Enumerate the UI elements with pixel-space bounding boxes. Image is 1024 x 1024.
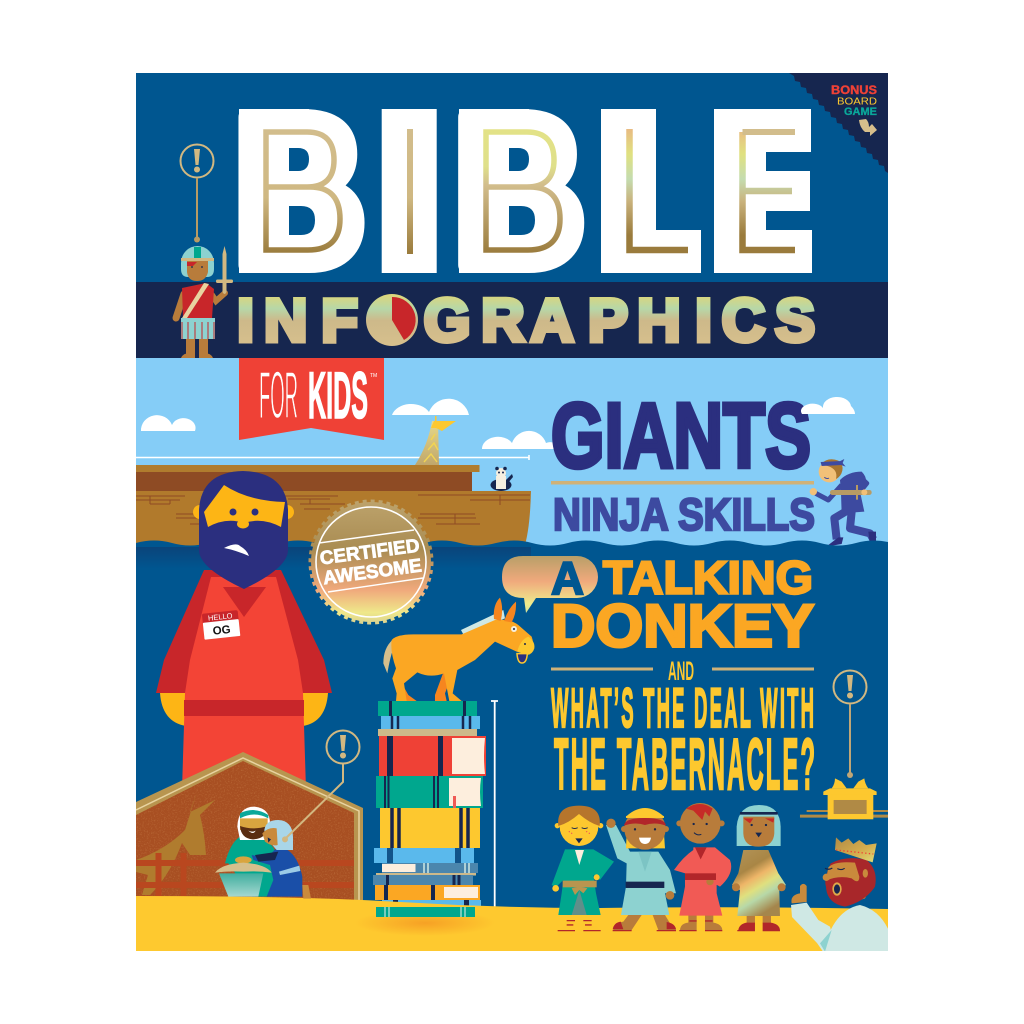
panda	[490, 467, 513, 491]
letter B	[458, 109, 584, 273]
letter E	[714, 109, 812, 273]
donkey snout	[517, 637, 534, 655]
steel book	[373, 875, 473, 885]
donkey ears	[494, 598, 516, 622]
Og robe	[182, 577, 306, 790]
callout: alert pin	[180, 144, 214, 242]
bottom book	[376, 907, 475, 917]
Og face	[204, 485, 285, 527]
banner text: TM	[370, 373, 377, 379]
donkey tail	[383, 640, 392, 673]
yellow book	[380, 808, 480, 848]
ninja	[810, 459, 876, 546]
Og nose	[237, 520, 249, 528]
king crown	[835, 837, 877, 862]
height measure line	[491, 701, 498, 917]
steel book with pages	[382, 863, 478, 873]
donkey body and head	[391, 620, 533, 701]
blue book	[374, 848, 474, 863]
king beard and hair	[825, 858, 876, 907]
Mary head	[262, 820, 293, 850]
donkey mane	[461, 610, 505, 634]
king neck	[855, 885, 872, 902]
silhouette: donkey	[136, 792, 215, 895]
donkey mouth	[517, 654, 527, 663]
teal book	[378, 701, 477, 716]
WHAT'S THE DEAL WITH: WHAT’S THE DEAL WITH	[551, 676, 814, 739]
Og mouth	[224, 544, 249, 556]
bonus text: BOARD	[837, 96, 877, 108]
letter L	[601, 109, 701, 273]
BIBLE title	[238, 109, 812, 273]
baby	[235, 856, 252, 864]
navy title band	[136, 282, 888, 358]
king eyes	[825, 868, 845, 870]
top blue background	[136, 73, 888, 283]
king robe	[823, 905, 889, 952]
kid 1	[552, 806, 614, 931]
callout: tabernacle alert pin	[834, 670, 866, 778]
bonus text	[832, 85, 877, 116]
letter B: B	[453, 72, 586, 311]
Og ears	[193, 505, 207, 519]
donkey eye	[511, 626, 517, 632]
banner text: FOR	[259, 358, 298, 433]
GIANTS: GIANTS	[551, 385, 811, 487]
divider rules	[551, 668, 814, 670]
letter B: B	[233, 72, 366, 311]
pie chart letter O	[366, 294, 418, 346]
bonus corner	[789, 73, 888, 173]
water with wave top	[136, 540, 892, 951]
ninja arms	[816, 474, 867, 500]
ark cabin	[136, 472, 472, 492]
letter E: E	[709, 70, 813, 311]
seal text: AWESOME	[322, 556, 423, 589]
kid 3	[674, 803, 731, 931]
Mary robe	[252, 849, 302, 897]
manger	[215, 863, 272, 897]
blue book	[381, 716, 480, 729]
Og the giant	[156, 471, 332, 790]
ninja body	[840, 472, 866, 513]
THE TABERNACLE?: THE TABERNACLE?	[554, 725, 815, 805]
letter L: L	[595, 72, 699, 312]
Joseph robe	[225, 837, 278, 897]
tan book	[378, 729, 477, 736]
Joseph and Mary with manger	[215, 807, 311, 899]
ark of the covenant	[800, 778, 889, 819]
Og hands	[160, 693, 328, 726]
ninja sword	[830, 485, 872, 500]
headline text	[551, 385, 855, 805]
speech bubble with A: A	[551, 552, 584, 604]
DONKEY: DONKEY	[551, 592, 814, 660]
text: KIDS	[308, 358, 368, 432]
certified awesome seal	[311, 502, 431, 622]
donkey	[383, 598, 534, 701]
blue book	[382, 900, 481, 907]
TALKING: TALKING	[603, 552, 813, 604]
king	[791, 837, 889, 952]
tunic	[182, 283, 214, 318]
Joseph head	[237, 807, 270, 840]
speech bubble with A	[502, 552, 598, 613]
ninja head	[819, 461, 840, 482]
Og sleeves	[156, 570, 332, 693]
sword	[216, 246, 233, 294]
helmet and face	[181, 246, 214, 281]
king mouth	[832, 882, 842, 896]
Og collar	[223, 587, 266, 617]
seal text	[319, 536, 423, 589]
ark deck	[136, 465, 480, 472]
ark hull	[136, 491, 531, 548]
hull bricks	[136, 495, 530, 524]
icon: bonus arrow	[859, 119, 877, 136]
callout: stable alert pin	[285, 730, 360, 839]
Og beard and hair	[199, 471, 288, 589]
INFOGRAPHICS wordmark: INFOGRAPHICS	[237, 287, 815, 354]
king face	[826, 862, 859, 881]
banner text	[260, 371, 377, 420]
stable	[136, 752, 363, 905]
king ear	[863, 869, 868, 878]
cloud over S	[801, 397, 855, 414]
legs	[186, 339, 195, 354]
kid 4	[732, 805, 786, 931]
book stack	[373, 701, 486, 907]
arms	[176, 294, 184, 318]
rule	[551, 481, 814, 484]
ground shadow under books	[355, 910, 495, 936]
Og eyes	[230, 508, 236, 516]
sky background	[136, 358, 888, 553]
letter B	[238, 109, 365, 273]
NINJA SKILLS: NINJA SKILLS	[553, 489, 815, 540]
shadow under ark	[136, 547, 531, 569]
orange book	[375, 885, 480, 900]
king hand	[791, 884, 807, 903]
white measure line	[136, 455, 529, 460]
giraffe	[415, 416, 456, 465]
letter I	[382, 109, 437, 273]
name tag: HELLO	[208, 611, 233, 623]
skirt	[181, 318, 215, 339]
headline text: AND	[668, 656, 694, 686]
name tag	[202, 610, 240, 640]
ninja legs	[834, 510, 873, 539]
seal text: CERTIFIED	[319, 536, 421, 570]
gold inline decoration	[266, 129, 795, 254]
bonus text: BONUS	[831, 83, 877, 97]
red book	[379, 736, 486, 776]
ark structure	[136, 416, 531, 548]
FOR KIDS banner	[239, 358, 384, 440]
name tag: OG	[212, 624, 231, 638]
letter I: I	[374, 70, 444, 311]
donkey far legs	[398, 670, 454, 701]
sash	[182, 283, 209, 318]
ground	[136, 896, 888, 951]
teal book with pages	[376, 776, 483, 813]
people illustrations	[552, 778, 889, 931]
soldier figure	[176, 144, 233, 358]
kid 2	[606, 808, 676, 931]
clouds	[141, 399, 558, 449]
bonus text: GAME	[844, 106, 877, 118]
king arm	[791, 903, 837, 952]
Og belt	[184, 700, 304, 716]
fence	[136, 853, 354, 896]
thin tan book	[376, 873, 476, 876]
